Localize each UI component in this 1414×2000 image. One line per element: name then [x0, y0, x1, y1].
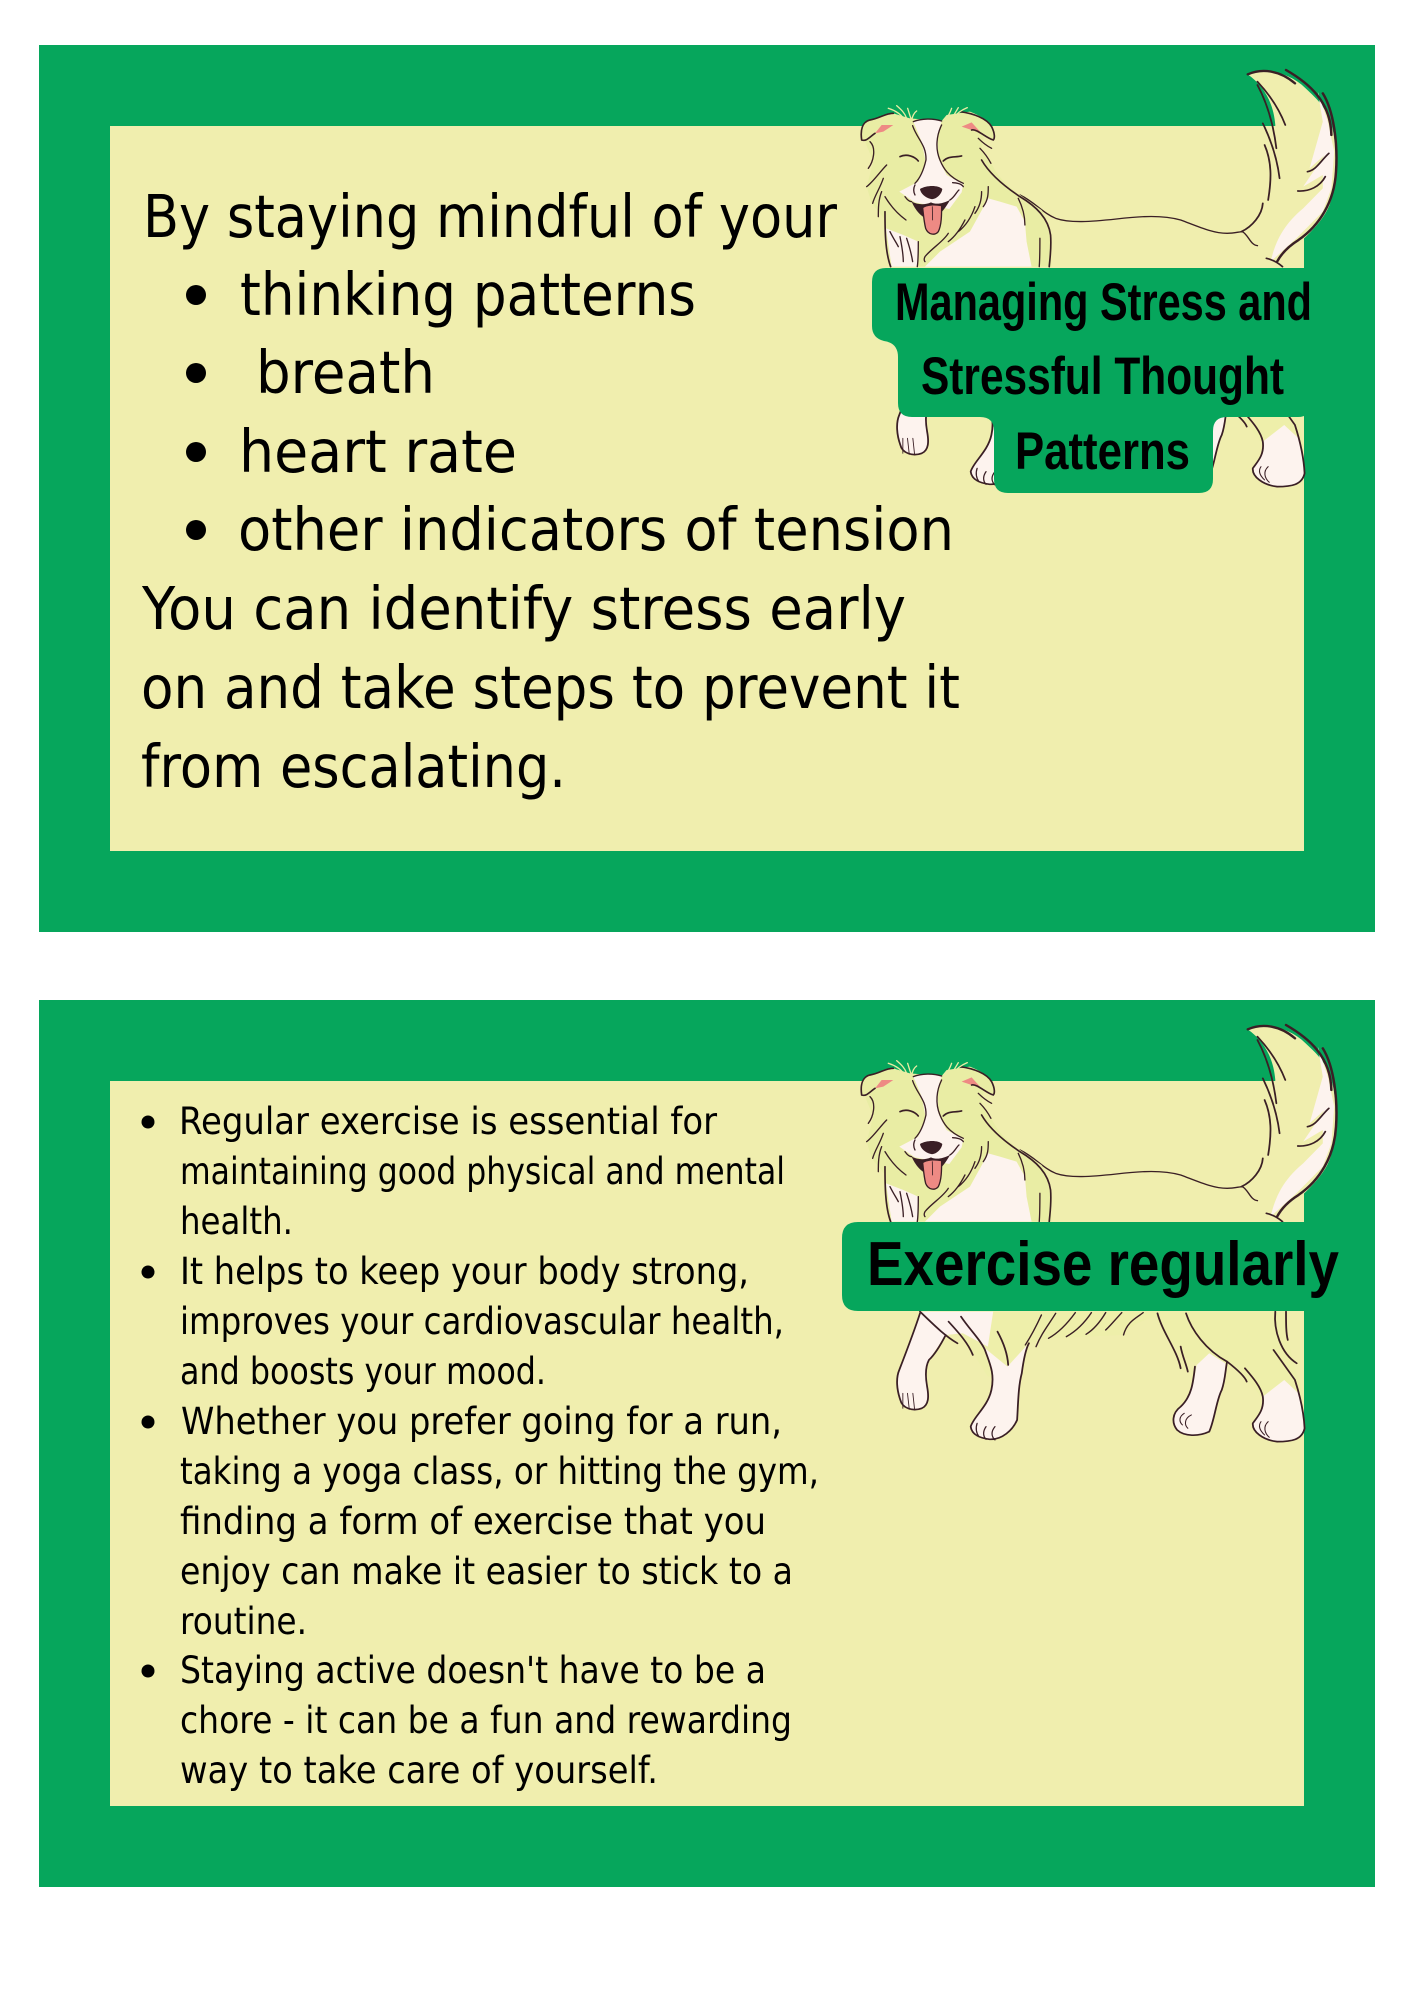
bullet list: indicators: thinking patterns [240, 260, 696, 329]
title text: Stressful Thought [921, 347, 1284, 406]
cream content area [110, 1081, 1304, 1806]
cream content area [110, 126, 1304, 851]
conclusion text: You can identify stress early [141, 574, 906, 643]
bullet: staying active: way to take care of yourself. [180, 1749, 658, 1792]
bullet: benefits: and boosts your mood. [180, 1350, 546, 1393]
bullet: why exercise: Regular exercise is essential for [179, 1100, 718, 1143]
conclusion text: on and take steps to prevent it [141, 653, 960, 722]
panel: exercise card [39, 1000, 1375, 1887]
title text [895, 273, 1312, 481]
illustration: happy dog [861, 1025, 1337, 1442]
conclusion text: from escalating. [141, 732, 566, 801]
title banner shape [872, 268, 1310, 493]
bullet: finding a routine: Whether you prefer going for a run, [181, 1400, 782, 1443]
bullet: benefits: It helps to keep your body strong, [180, 1250, 749, 1293]
bullet: finding a routine: enjoy can make it easier to stick to a [180, 1550, 793, 1593]
bullet list: indicators [186, 260, 954, 564]
green card frame [39, 45, 1375, 932]
bullet: finding a routine: routine. [180, 1600, 307, 1643]
bullet: why exercise [142, 1100, 785, 1243]
panel: stress awareness card [39, 45, 1375, 932]
bullet: why exercise: maintaining good physical and mental [180, 1150, 785, 1193]
conclusion text [141, 574, 960, 801]
bullet list: indicators: breath [256, 338, 435, 407]
title banner shape [842, 1222, 1310, 1311]
bullet: finding a routine [142, 1400, 819, 1643]
bullet list: indicators: other indicators of tension [238, 495, 954, 564]
bullet: benefits [142, 1250, 784, 1393]
bullet: staying active [142, 1649, 792, 1792]
intro text: By staying mindful of your [143, 182, 838, 251]
title text: Exercise regularly [867, 1230, 1339, 1299]
bullet: finding a routine: taking a yoga class, or hitting the gym, [180, 1450, 819, 1493]
bullet: finding a routine: finding a form of exercise that you [180, 1500, 766, 1543]
bullet: staying active: chore - it can be a fun and rewarding [180, 1699, 792, 1742]
title text: Patterns [1015, 422, 1190, 481]
bullet: staying active: Staying active doesn't have to be a [180, 1649, 766, 1692]
bullet: benefits: improves your cardiovascular health, [180, 1300, 784, 1343]
title text: Managing Stress and [895, 273, 1312, 332]
green card frame [39, 1000, 1375, 1887]
bullet: why exercise: health. [180, 1200, 293, 1243]
bullet list: indicators: heart rate [239, 417, 517, 486]
illustration: happy dog [861, 70, 1337, 487]
